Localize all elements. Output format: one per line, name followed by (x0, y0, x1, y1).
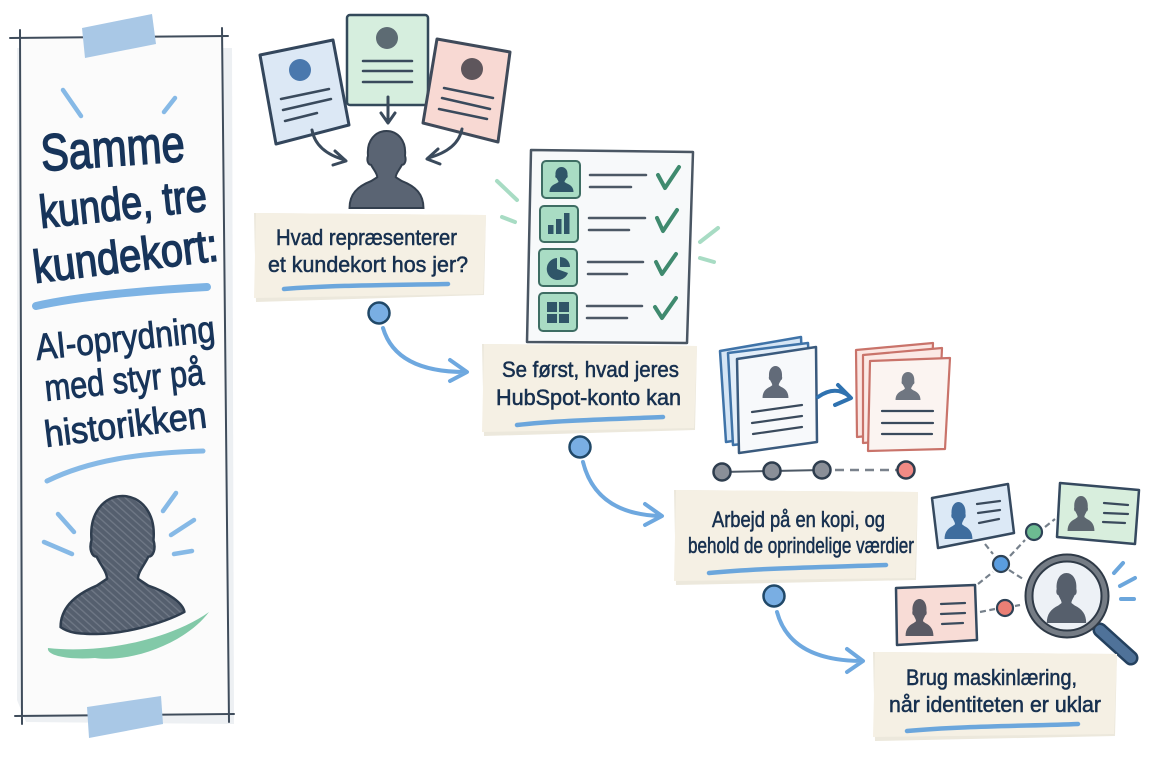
note 1 text: Hvad repræsenterer (276, 225, 457, 250)
connector 2 (570, 436, 662, 525)
connector 3 (764, 586, 863, 672)
note 2 underline (517, 417, 663, 425)
heading: subtitle: AI-oprydning (34, 308, 217, 368)
step 4: identity matching network (896, 483, 1139, 658)
icon: pie tile (539, 249, 577, 286)
note 3 text: Arbejd på en kopi, og (712, 507, 885, 532)
arrows into silhouette (312, 97, 462, 165)
icon: red card stack (856, 343, 950, 451)
note 1 text: et kundekort hos jer? (268, 252, 468, 277)
icon: top tape (82, 14, 156, 58)
icon: red card (423, 39, 510, 142)
step 2: checklist panel (497, 150, 718, 343)
note 4 (873, 652, 1117, 741)
note 2 (482, 344, 697, 436)
note 4 text: når identiteten er uklar (889, 692, 1101, 717)
icon: person tile (542, 161, 580, 198)
icon: top rays (63, 90, 175, 116)
heading: main title: kunde, tre (37, 169, 209, 238)
icon: green ID card (1057, 483, 1139, 544)
icon: grid tile (539, 293, 577, 331)
icon: bar tile (540, 206, 578, 242)
icon: magnifier rays (1114, 563, 1135, 599)
icon: customer silhouette (61, 496, 184, 634)
note 4 text: Brug maskinlæring, (906, 665, 1077, 690)
note 1 underline (284, 284, 448, 289)
note 4 underline (907, 724, 1078, 731)
icon: magnifying glass (1029, 558, 1131, 658)
note 2 text: HubSpot-konto kan (496, 385, 681, 410)
heading: subtitle: med styr på (43, 351, 206, 409)
note 2 text: Se først, hvad jeres (502, 357, 679, 382)
title underline (36, 287, 207, 306)
list lines (587, 175, 646, 318)
arrow: copy to red stack (818, 385, 851, 405)
network nodes (993, 524, 1042, 616)
panel: title sidebar (10, 14, 234, 738)
note 3 underline (709, 565, 886, 573)
subtitle underline (47, 451, 203, 481)
heading: main title: Samme (39, 115, 186, 183)
icon: bottom tape (87, 696, 163, 738)
icon: red ID card (896, 585, 977, 645)
heading: main title (30, 115, 221, 293)
note 3 text (688, 507, 914, 558)
note 3 text: behold de oprindelige værdier (688, 533, 914, 558)
connector 1 (368, 302, 467, 381)
note 2 text (496, 357, 681, 410)
note 4 text (889, 665, 1101, 717)
note 1 text (268, 225, 468, 277)
icon: silhouette (350, 131, 423, 208)
icon: blue card stack (720, 337, 817, 453)
icon: check marks (655, 167, 679, 318)
note 1 (254, 213, 486, 302)
network dashed links (978, 519, 1055, 612)
decorative green ticks (497, 181, 718, 262)
note 3 (674, 490, 918, 585)
step 3: card stacks and timeline (714, 337, 950, 480)
icon: silhouette rays (44, 493, 194, 554)
icon: blue card (260, 40, 349, 144)
heading: main title: kundekort: (30, 219, 221, 293)
icon: blue ID card (932, 484, 1014, 548)
icon: green card (347, 15, 428, 105)
step 1: three customer cards merging (260, 15, 510, 208)
heading: subtitle (34, 308, 217, 455)
green swoosh (48, 612, 209, 659)
heading: subtitle: historikken (42, 394, 209, 455)
timeline (714, 462, 914, 480)
